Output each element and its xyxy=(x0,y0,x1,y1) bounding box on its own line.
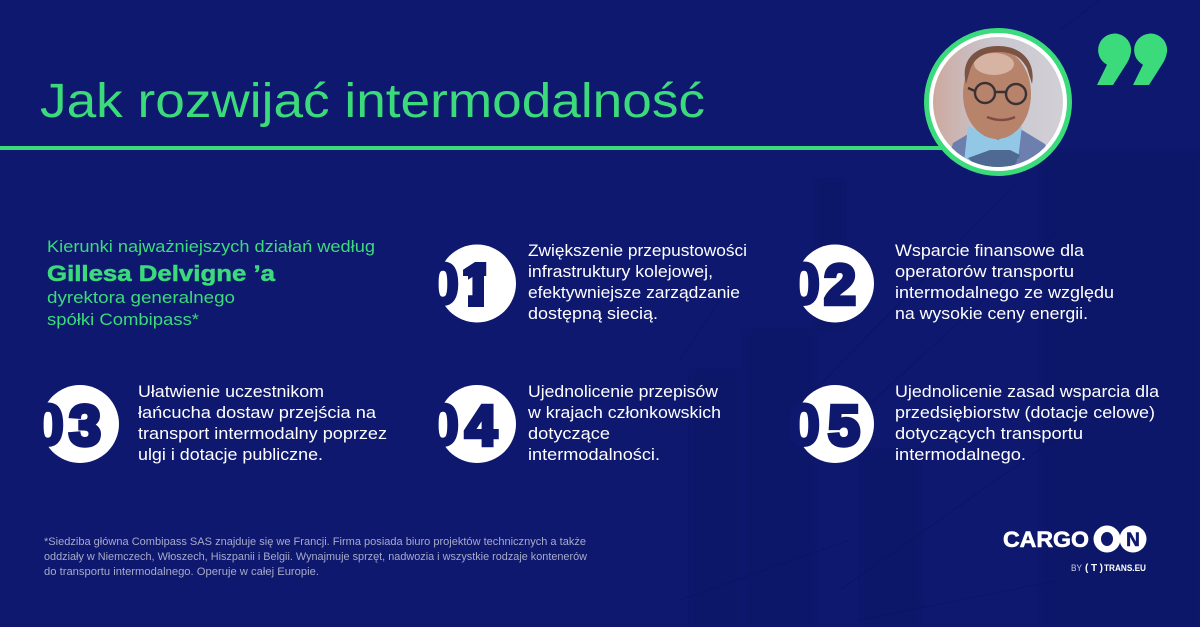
portrait photo xyxy=(926,30,1070,174)
number badge 04: 0 xyxy=(427,393,459,458)
title: Jak rozwijać intermodalność xyxy=(40,75,705,128)
text 03 xyxy=(138,383,387,464)
number badge 03: 0 xyxy=(32,393,64,458)
text 04 xyxy=(527,383,721,464)
text 05 xyxy=(895,383,1160,464)
logo: CargoON by Trans.eu: BY xyxy=(1071,563,1082,573)
footnote xyxy=(44,536,587,578)
logo: CargoON by Trans.eu: CARGO xyxy=(1003,527,1089,552)
number badge 02: 2 xyxy=(824,253,856,317)
text 01: infrastruktury kolejowej, xyxy=(528,263,713,281)
logo: CargoON by Trans.eu xyxy=(1003,526,1146,574)
intro text block: Kierunki najważniejszych działań według xyxy=(47,238,375,256)
number badge 01: 1 xyxy=(462,253,494,317)
number badge 05: 0 xyxy=(788,393,820,458)
footnote: *Siedziba główna Combipass SAS znajduje się we Francji. Firma posiada biuro projektów technicznych a także xyxy=(44,536,586,548)
intro text block: dyrektora generalnego xyxy=(47,289,235,307)
text 04: intermodalności. xyxy=(528,446,660,464)
footnote: do transportu intermodalnego. Operuje w całej Europie. xyxy=(44,566,319,578)
text 01 xyxy=(528,242,747,323)
logo: CargoON by Trans.eu: N xyxy=(1126,530,1140,551)
text 04: Ujednolicenie przepisów xyxy=(528,383,718,401)
text 01: Zwiększenie przepustowości xyxy=(528,242,747,260)
text 01: dostępną siecią. xyxy=(528,305,658,323)
number badge 01: 0 xyxy=(427,252,459,317)
item 02 xyxy=(788,242,1114,323)
number badge 03: 3 xyxy=(69,394,101,458)
text 03: transport intermodalny poprzez xyxy=(138,425,387,443)
number badge 05: 5 xyxy=(828,394,860,458)
number badge 05 xyxy=(788,385,874,463)
text 05: intermodalnego. xyxy=(895,446,1026,464)
text 04: dotyczące xyxy=(528,425,610,443)
item 03 xyxy=(32,383,387,464)
item 04 xyxy=(427,383,721,464)
text 03: łańcucha dostaw przejścia na xyxy=(138,404,377,422)
text 02: Wsparcie finansowe dla xyxy=(895,242,1085,260)
number badge 03 xyxy=(32,385,119,463)
logo: CargoON by Trans.eu: TRANS.EU xyxy=(1104,563,1146,574)
number badge 02 xyxy=(788,244,874,322)
footnote: oddziały w Niemczech, Włoszech, Hiszpanii i Belgii. Wynajmuje sprzęt, nadwozia i wszystkie rodzaje kontenerów xyxy=(44,551,587,563)
number badge 04: 4 xyxy=(465,394,497,458)
text 05: przedsiębiorstw (dotacje celowe) xyxy=(895,404,1155,422)
item 01 xyxy=(427,242,747,323)
text 03: ulgi i dotacje publiczne. xyxy=(138,446,323,464)
item 05 xyxy=(788,383,1160,464)
title underline xyxy=(0,146,950,150)
text 03: Ułatwienie uczestnikom xyxy=(138,383,324,401)
intro text block: Gillesa Delvigne ’a xyxy=(47,261,276,286)
number badge 04 xyxy=(427,385,516,463)
text 02 xyxy=(895,242,1114,323)
text 02: intermodalnego ze względu xyxy=(895,284,1114,302)
logo: CargoON by Trans.eu: (T) xyxy=(1085,563,1103,574)
intro text block: spółki Combipass* xyxy=(47,311,200,329)
text 05: dotyczących transportu xyxy=(895,425,1083,443)
text 02: na wysokie ceny energii. xyxy=(895,305,1088,323)
intro text block xyxy=(47,238,375,329)
text 05: Ujednolicenie zasad wsparcia dla xyxy=(895,383,1160,401)
text 01: efektywniejsze zarządzanie xyxy=(528,284,740,302)
text 04: w krajach członkowskich xyxy=(527,404,721,422)
number badge 01 xyxy=(427,244,516,322)
icon: quotation marks xyxy=(1097,34,1167,85)
number badge 02: 0 xyxy=(788,252,820,317)
text 02: operatorów transportu xyxy=(895,263,1074,281)
